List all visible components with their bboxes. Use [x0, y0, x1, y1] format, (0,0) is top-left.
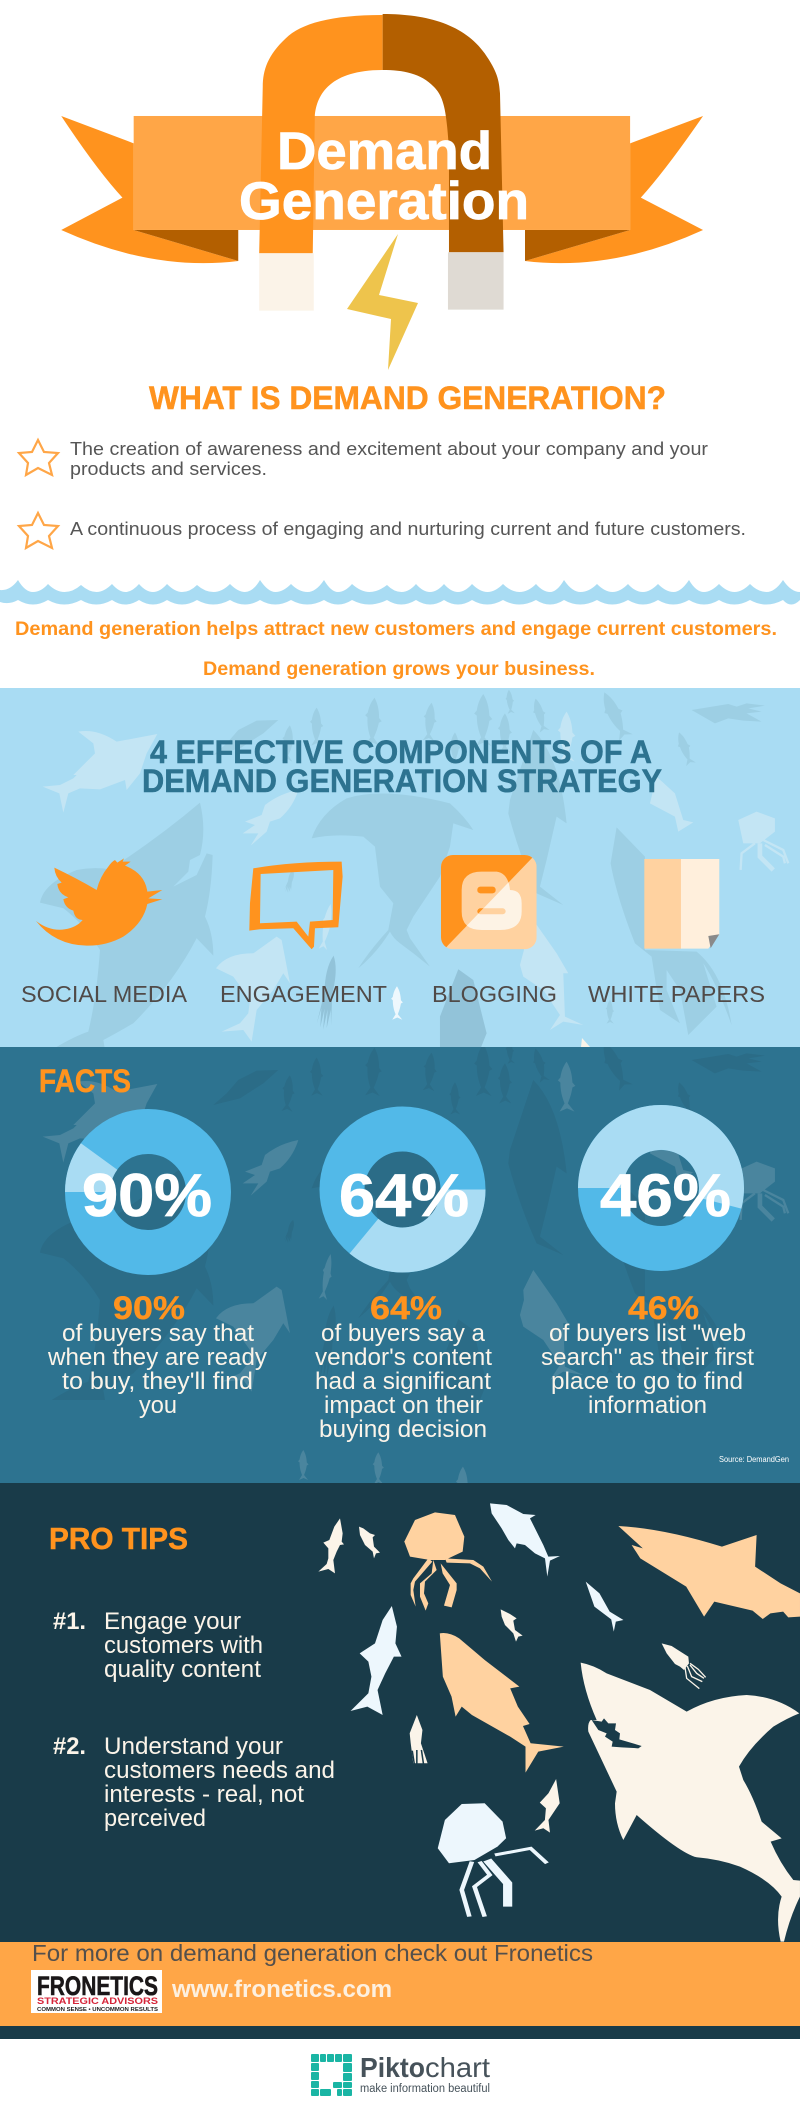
donut chart: 64 percent: [339, 1129, 486, 1273]
icon: piktochart mark: [311, 2054, 352, 2096]
fact 1 text: 90%: [113, 1290, 185, 1326]
fact 2 text: of buyers say a: [321, 1320, 486, 1347]
tip 2: customers needs and: [104, 1757, 335, 1784]
definition text 1: products and services.: [70, 458, 267, 479]
tip 1: Engage your: [104, 1608, 241, 1635]
tagline: make information beautiful: [360, 2083, 490, 2095]
donut chart: 46 percent: 46%: [600, 1162, 731, 1229]
header: magnet and ribbon: [61, 14, 703, 370]
panel: footer call to action: [0, 1940, 800, 2026]
call to action text: For more on demand generation check out Fronetics: [32, 1940, 593, 1966]
panel: facts: [0, 1039, 800, 1507]
definition 2 with star: [19, 513, 746, 548]
heading: facts: FACTS: [39, 1063, 131, 1099]
icon: lightning bolt: [347, 234, 418, 370]
heading: pro tips: PRO TIPS: [49, 1521, 188, 1556]
tip 2: perceived: [104, 1805, 206, 1832]
logo: fronetics: FRONETICS: [37, 1971, 158, 2001]
fact 3 text: 46%: [628, 1290, 699, 1326]
icon: star: [19, 440, 58, 475]
component labels: SOCIAL MEDIA: [21, 981, 188, 1007]
heading: components: DEMAND GENERATION STRATEGY: [142, 763, 662, 799]
definition text 2: A continuous process of engaging and nurturing current and future customers.: [70, 518, 746, 539]
tip 1: customers with: [104, 1632, 263, 1659]
donut chart: 90 percent: 90%: [82, 1162, 212, 1229]
tip 2: [53, 1733, 335, 1832]
fact 1 text: when they are ready: [47, 1344, 267, 1371]
icon: white paper: [644, 859, 719, 949]
fact 3 text: place to go to find: [551, 1368, 743, 1395]
tip 1: #1.: [53, 1608, 86, 1635]
fact 3 text: of buyers list "web: [549, 1320, 746, 1347]
fact 2 text: had a significant: [315, 1368, 491, 1395]
title: Demand: [277, 122, 492, 181]
icon: horseshoe magnet: [259, 14, 504, 311]
illustration: sea creatures: [318, 1503, 800, 1942]
icon: twitter bird: [36, 858, 162, 946]
wordmark: chart: [425, 2052, 490, 2083]
fact 2 text: vendor's content: [315, 1344, 492, 1371]
fact 3 text: information: [588, 1392, 707, 1419]
donut chart: 46 percent: [578, 1105, 744, 1248]
donut chart: 64 percent: 64%: [339, 1162, 469, 1229]
fact 1 text: you: [139, 1392, 177, 1419]
component labels: WHITE PAPERS: [588, 981, 765, 1007]
orange statement text: Demand generation helps attract new customers and engage current customers.: [15, 618, 777, 640]
fact 2 text: buying decision: [319, 1416, 487, 1443]
ribbon banner: [61, 116, 703, 263]
fact 2 text: impact on their: [324, 1392, 483, 1419]
fact 1 text: of buyers say that: [62, 1320, 254, 1347]
panel: components: [0, 688, 800, 1047]
fact 3 text: [541, 1290, 754, 1419]
icon: star: [19, 513, 58, 548]
logo: fronetics: COMMON SENSE • UNCOMMON RESULTS: [37, 2007, 158, 2013]
logo: fronetics: [31, 1970, 162, 2013]
tip 1: [53, 1608, 263, 1683]
fact 1 text: [47, 1290, 267, 1419]
component labels: ENGAGEMENT: [220, 981, 387, 1007]
fact 2 text: [315, 1290, 492, 1443]
icon: speech bubble: [249, 862, 343, 949]
component labels: BLOGGING: [432, 981, 557, 1007]
wordmark: Pikto: [360, 2052, 425, 2083]
logo: piktochart: [311, 2052, 490, 2096]
fact 3 text: search" as their first: [541, 1344, 754, 1371]
tip 2: interests - real, not: [104, 1781, 304, 1808]
definition 1 with star: [19, 438, 708, 479]
orange statement text: Demand generation grows your business.: [203, 658, 595, 680]
fact 1 text: to buy, they'll find: [62, 1368, 253, 1395]
donut chart: 90 percent: [65, 1132, 212, 1252]
icon: blogger: [441, 855, 537, 953]
website url: www.fronetics.com: [171, 1976, 392, 2003]
heading: what is demand generation: WHAT IS DEMAND GENERATION?: [149, 380, 666, 416]
fact 2 text: 64%: [370, 1290, 442, 1326]
definition text 1: The creation of awareness and excitement about your company and your: [70, 438, 708, 459]
wave divider: [0, 580, 800, 604]
source note: Source: DemandGen: [719, 1455, 789, 1464]
heading: components: 4 EFFECTIVE COMPONENTS OF A: [150, 734, 652, 770]
panel: pro tips: [0, 1483, 800, 2039]
tip 2: Understand your: [104, 1733, 283, 1760]
logo: fronetics: STRATEGIC ADVISORS: [37, 1996, 158, 2007]
tip 2: #2.: [53, 1733, 86, 1760]
title: Generation: [239, 172, 529, 231]
tip 1: quality content: [104, 1656, 261, 1683]
